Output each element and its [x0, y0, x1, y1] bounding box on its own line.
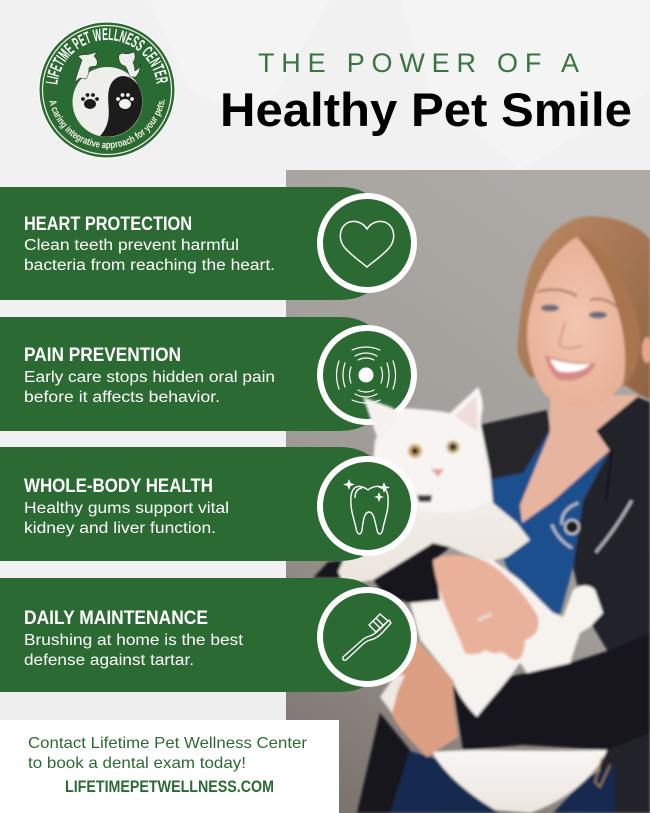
text: heart protection: HEART PROTECTION	[24, 214, 192, 235]
jacket left collar	[470, 410, 550, 480]
callout: contact box: Contact Lifetime Pet Wellness Center	[28, 735, 307, 752]
cat	[119, 52, 141, 77]
title	[220, 48, 632, 136]
icon: sparkling tooth	[343, 479, 390, 534]
cat middle body and tail	[410, 560, 603, 717]
panel: daily maintenance: defense against tartar.	[24, 652, 194, 669]
panel: daily maintenance: Brushing at home is the best	[24, 632, 244, 649]
jacket left lower	[357, 713, 410, 813]
panel: whole-body health: kidney and liver function.	[24, 520, 216, 537]
logo bottom text: A caring integrative approach for your pets.	[49, 100, 166, 150]
cat upper body	[338, 410, 530, 585]
icon: pain waves	[336, 347, 396, 403]
panel: heart protection	[0, 187, 414, 300]
lower hand	[383, 640, 458, 757]
title: THE POWER OF A	[258, 48, 579, 78]
text: daily maintenance: DAILY MAINTENANCE	[24, 608, 208, 629]
face	[527, 237, 637, 408]
jacket right	[573, 397, 650, 813]
bag string	[595, 757, 610, 787]
white fur at wrist	[380, 675, 405, 713]
ring	[478, 614, 492, 620]
cat ear overlapping badge	[363, 397, 400, 440]
neck and chest	[520, 395, 637, 523]
hair	[518, 217, 650, 400]
logo	[38, 22, 176, 158]
black paw	[81, 93, 99, 109]
dog	[75, 52, 97, 82]
brows and eyes	[537, 290, 577, 296]
icon: toothbrush	[343, 614, 391, 660]
dark sliver at left	[313, 560, 345, 578]
panel: pain prevention: Early care stops hidden oral pain	[24, 369, 275, 386]
text: pain prevention: PAIN PREVENTION	[24, 345, 181, 366]
hair strand over face	[577, 237, 640, 388]
upper hand	[433, 555, 538, 660]
white paw	[116, 93, 134, 109]
icon: heart	[340, 221, 394, 267]
panel: pain prevention	[0, 317, 414, 431]
panel: daily maintenance	[0, 578, 414, 692]
smile	[545, 355, 596, 381]
panel: pain prevention: before it affects behavior.	[24, 389, 220, 406]
right sleeve	[453, 633, 650, 750]
callout: contact box	[0, 720, 339, 813]
cat eyes	[408, 444, 422, 458]
panel: heart protection: Clean teeth prevent harmful	[24, 237, 239, 254]
ear	[642, 337, 650, 363]
panel: heart protection: bacteria from reaching the heart.	[24, 257, 275, 274]
scrubs	[480, 427, 610, 615]
callout: contact box: LIFETIMEPETWELLNESS.COM	[65, 777, 274, 796]
nose	[559, 322, 582, 348]
badge ring	[320, 196, 414, 290]
cat nose	[431, 469, 444, 477]
left sleeve	[373, 543, 450, 603]
badge ring	[320, 590, 414, 684]
badge ring	[320, 459, 414, 553]
yin yang	[72, 67, 142, 137]
panel: whole-body health	[0, 447, 414, 561]
navy lower scrubs	[390, 750, 500, 813]
embroidered logo marks	[552, 500, 632, 552]
title: Healthy Pet Smile	[220, 83, 632, 136]
photo: woman holding white cat	[286, 170, 650, 813]
cat collar	[417, 495, 432, 502]
panel: whole-body health: Healthy gums support vital	[24, 500, 229, 517]
text: whole-body health: WHOLE-BODY HEALTH	[24, 476, 213, 497]
cat lower body	[432, 750, 607, 813]
callout: contact box: to book a dental exam today!	[28, 755, 246, 772]
cat head	[363, 387, 490, 513]
badge ring	[320, 328, 414, 422]
logo top text: LIFETIME PET WELLNESS CENTER	[46, 28, 168, 84]
